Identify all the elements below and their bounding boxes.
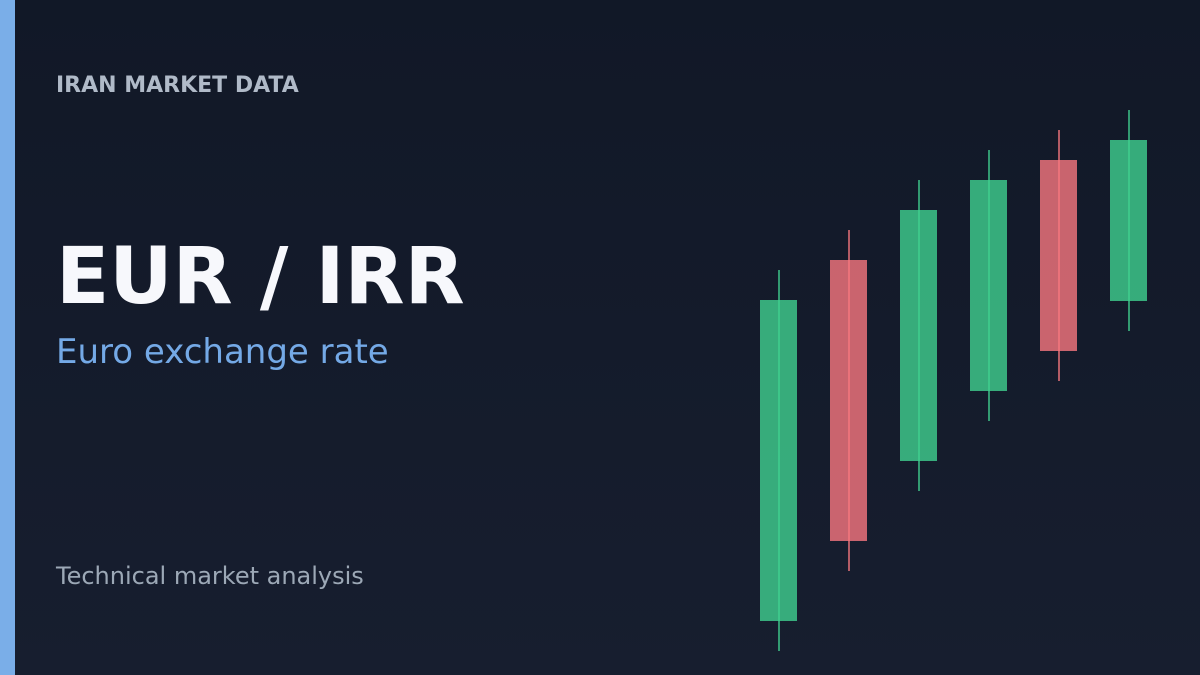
candle 3: green xyxy=(900,180,937,491)
tagline: Technical market analysis xyxy=(55,562,364,590)
title: EUR / IRR xyxy=(56,232,465,322)
accent bar xyxy=(0,0,15,675)
candle 2: red xyxy=(830,230,867,571)
candle 4: green xyxy=(970,150,1007,421)
candle 6: green xyxy=(1110,110,1147,331)
candle 5: red xyxy=(1040,130,1077,381)
eyebrow heading: IRAN MARKET DATA xyxy=(56,73,299,98)
candlestick chart xyxy=(760,110,1147,651)
subtitle: Euro exchange rate xyxy=(56,332,389,372)
candle 1: green xyxy=(760,270,797,651)
